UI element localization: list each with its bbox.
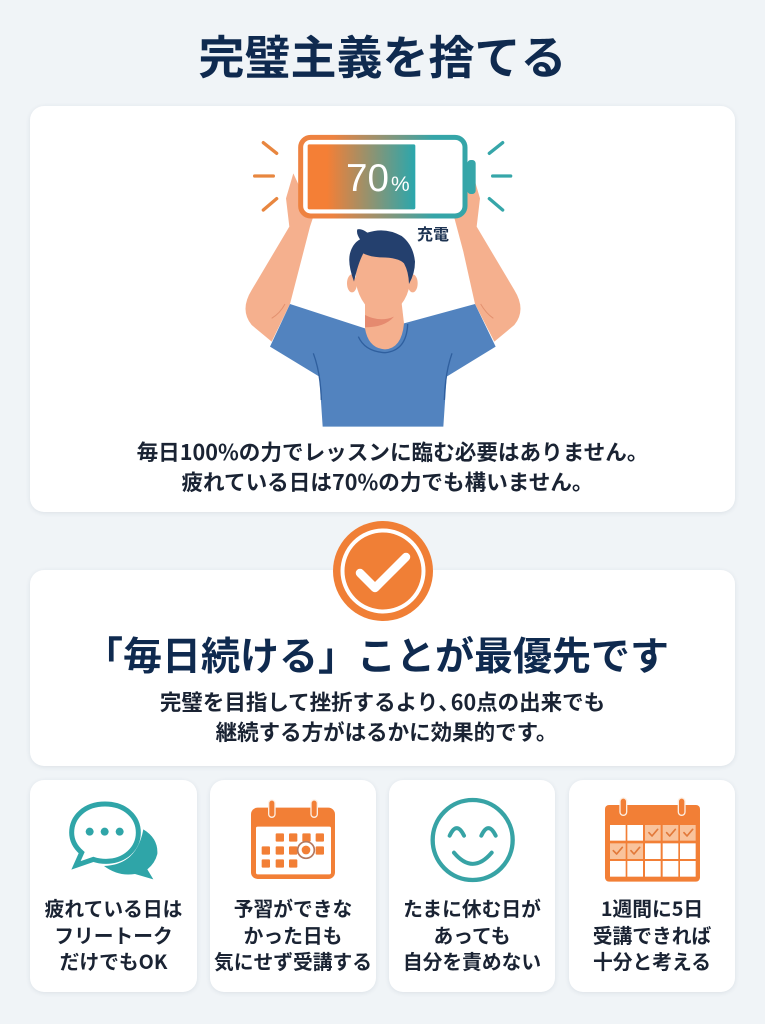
card text: 予習ができな — [234, 893, 352, 922]
card text: たまに休む日が — [403, 893, 541, 922]
card text: 疲れている日は — [45, 893, 182, 922]
illustration: man holding battery — [246, 134, 520, 427]
card text: 受講できれば — [593, 920, 711, 948]
card text: あっても — [433, 920, 511, 948]
icon: battery — [255, 137, 511, 216]
card text: フリートーク — [54, 920, 173, 948]
card text: 気にせず受講する — [214, 946, 372, 975]
panel: five days a week — [569, 780, 735, 992]
card text — [593, 893, 711, 975]
icon: calendar with checks — [605, 798, 700, 882]
panel: no preparation — [210, 780, 376, 992]
panel: top priority — [30, 570, 735, 766]
icon: chat bubbles — [69, 802, 158, 880]
title: 完璧主義を捨てる — [198, 22, 566, 88]
battery percent sign: % — [391, 173, 410, 196]
body text — [160, 686, 605, 746]
body text — [137, 436, 648, 497]
battery level text: 70 — [346, 157, 389, 200]
card text — [214, 893, 372, 975]
label: charging: 充電 — [417, 221, 449, 245]
card text — [403, 893, 541, 975]
icon: smiley — [430, 798, 515, 882]
card text: だけでもOK — [60, 946, 167, 975]
body text: 継続する方がはるかに効果的です。 — [216, 716, 557, 746]
card text: 1週間に5日 — [601, 893, 703, 922]
body text: 完璧を目指して挫折するより、60点の出来でも — [160, 686, 605, 717]
body text: 疲れている日は70%の力でも構いません。 — [181, 466, 594, 497]
panel: battery illustration — [30, 106, 735, 512]
heading: 「毎日続ける」ことが最優先です — [84, 626, 669, 682]
card text — [45, 893, 182, 975]
panel: rest days — [389, 780, 555, 992]
icon: orange check badge — [333, 521, 433, 621]
body text: 毎日100%の力でレッスンに臨む必要はありません。 — [137, 436, 648, 467]
card text: かった日も — [244, 920, 342, 948]
card text: 十分と考える — [593, 946, 711, 975]
man — [245, 173, 520, 427]
icon: calendar with marked day — [251, 800, 335, 879]
card text: 自分を責めない — [403, 946, 541, 975]
panel: free talk — [30, 780, 197, 992]
